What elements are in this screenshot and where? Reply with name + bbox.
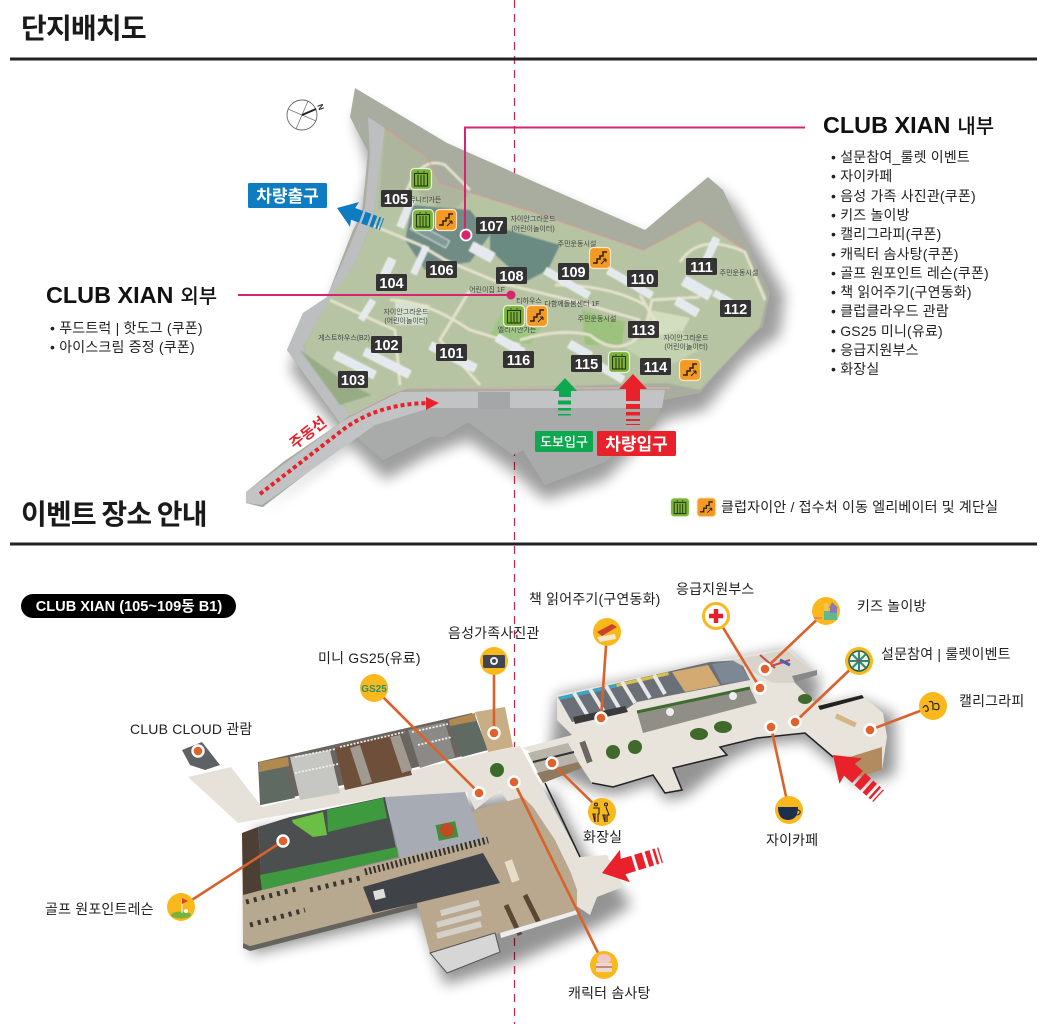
site map <box>246 88 785 512</box>
planters <box>606 745 620 759</box>
leader lines <box>181 611 933 965</box>
map place names: 엘리시안가든 <box>498 325 537 334</box>
marker dots <box>192 664 876 846</box>
map place names: 자이안그라운드 <box>383 307 429 316</box>
map place names: 다함께돌봄센터 1F <box>544 299 600 308</box>
building number tags: 114 <box>644 360 667 376</box>
labels: floor plan: 응급지원부스 <box>676 581 754 597</box>
legend: 클럽자이안 / 접수처 이동 엘리베이터 및 계단실 <box>721 499 998 515</box>
compass <box>287 100 326 130</box>
main road <box>246 390 665 505</box>
icon: cotton candy <box>590 951 618 979</box>
list: CLUB XIAN 내부: • 책 읽어주기(구연동화) <box>831 284 972 300</box>
main route dotted arrow <box>260 397 439 494</box>
list: CLUB XIAN 내부: • GS25 미니(유료) <box>831 323 943 339</box>
ground <box>246 88 770 507</box>
callout line: CLUB XIAN 외부 <box>238 290 516 300</box>
building number tags: 106 <box>429 263 454 279</box>
offices strip <box>558 660 750 722</box>
kids room <box>732 650 817 683</box>
labels: floor plan: 키즈 놀이방 <box>857 598 926 614</box>
arrow: pedestrian entrance <box>553 378 577 416</box>
building number tags: 115 <box>575 357 598 373</box>
labels: floor plan: 미니 GS25(유료) <box>318 650 421 666</box>
building number tags: 102 <box>374 338 399 354</box>
list: CLUB XIAN 외부 <box>50 320 203 355</box>
badge: 도보입구 <box>535 431 593 452</box>
building number tags: 103 <box>341 373 365 389</box>
list: CLUB XIAN 내부: • 캐릭터 솜사탕(쿠폰) <box>831 246 959 262</box>
badge: 차량출구 <box>248 183 327 208</box>
green site <box>300 128 767 415</box>
list: CLUB XIAN 내부: • 클럽클라우드 관람 <box>831 303 949 319</box>
stairs <box>430 933 500 973</box>
labels: floor plan: 화장실 <box>583 829 622 845</box>
red entrance arrow: right hall <box>822 742 890 809</box>
icon: GS25 <box>360 674 388 702</box>
labels: floor plan <box>45 581 1024 1001</box>
labels: floor plan: 골프 원포인트레슨 <box>45 901 154 917</box>
list: CLUB XIAN 내부: • 키즈 놀이방 <box>831 207 910 223</box>
cloud room <box>182 742 220 770</box>
building number tags: 116 <box>507 353 530 369</box>
map place names: 커뮤니티가든 <box>403 195 442 204</box>
heading: CLUB XIAN 내부: CLUB XIAN 내부 <box>823 112 994 138</box>
map place names: (어린이놀이터) <box>664 342 708 351</box>
list: CLUB XIAN 내부: • 캘리그라피(쿠폰) <box>831 226 941 242</box>
wood side <box>840 747 882 777</box>
floor plan shadows <box>250 650 895 985</box>
perimeter road <box>287 117 385 423</box>
list: CLUB XIAN 내부: • 화장실 <box>831 361 879 377</box>
list: CLUB XIAN 외부: • 푸드트럭 | 핫도그 (쿠폰) <box>50 320 203 336</box>
compass: N <box>315 103 326 112</box>
icon: GS25: GS25 <box>361 684 387 695</box>
labels: floor plan: 자이카페 <box>766 832 818 848</box>
list: CLUB XIAN 내부: • 응급지원부스 <box>831 342 919 358</box>
labels: floor plan: 음성가족사진관 <box>448 625 540 641</box>
labels: floor plan: CLUB CLOUD 관람 <box>130 721 252 737</box>
map place names: (어린이놀이터) <box>384 316 428 325</box>
badge: CLUB XIAN (105~109동 B1): CLUB XIAN (105~109동 B1) <box>36 599 222 615</box>
building number tags: 108 <box>499 269 524 285</box>
building number tags: 101 <box>439 346 464 362</box>
callout line: CLUB XIAN 내부 <box>460 128 805 240</box>
main route dotted arrow: 주동선 <box>287 414 330 453</box>
title: 단지배치도: 단지배치도 <box>21 13 146 44</box>
labels: floor plan: 책 읽어주기(구연동화) <box>529 591 661 607</box>
map place names <box>318 195 758 351</box>
icon: calligraphy <box>919 692 947 720</box>
fence <box>365 840 488 872</box>
elevator and stair icons on map <box>410 168 700 380</box>
labels: floor plan: 캐릭터 솜사탕 <box>568 985 651 1001</box>
edges <box>592 733 833 793</box>
icon: first aid <box>704 604 728 628</box>
icon: camera <box>480 647 508 675</box>
toilet block <box>528 743 582 783</box>
map place names: 자이안그라운드 <box>510 214 556 223</box>
courtyard <box>637 688 757 733</box>
golf area <box>258 797 398 890</box>
list: CLUB XIAN 외부: • 아이스크림 증정 (쿠폰) <box>50 339 195 355</box>
building number tags: 113 <box>632 323 655 339</box>
map place names: 어린이집 1F <box>469 285 505 294</box>
title: 이벤트 장소 안내: 이벤트 장소 안내 <box>21 499 207 530</box>
map place names: (어린이놀이터) <box>511 224 555 233</box>
labels: floor plan: 캘리그라피 <box>959 693 1024 709</box>
list: CLUB XIAN 내부: • 골프 원포인트 레슨(쿠폰) <box>831 265 989 281</box>
red entrance arrow: lower corridor <box>597 839 666 889</box>
map place names: 게스트하우스(B2) <box>318 333 370 342</box>
badge: 차량입구 <box>597 431 676 456</box>
plaza <box>385 792 482 858</box>
map place names: 주민운동시설 <box>578 314 616 323</box>
list: CLUB XIAN 내부: • 음성 가족 사진관(쿠폰) <box>831 188 976 204</box>
hall bar <box>818 695 864 710</box>
badge: CLUB XIAN (105~109동 B1) <box>21 594 236 618</box>
lower block <box>242 797 577 953</box>
icon: golf <box>167 893 195 921</box>
building number tags: 112 <box>724 302 747 318</box>
badge: 차량출구: 차량출구 <box>256 187 319 206</box>
floor plan: left wing <box>182 707 623 973</box>
heading: CLUB XIAN 외부: CLUB XIAN 외부 <box>46 282 217 308</box>
icon: book <box>593 618 621 646</box>
list: CLUB XIAN 내부: • 설문참여_룰렛 이벤트 <box>831 149 970 165</box>
corridor <box>188 746 623 915</box>
map place names: 주민운동시설 <box>720 268 758 277</box>
building number tags: 109 <box>561 265 586 281</box>
arrow: vehicle entrance <box>619 374 647 425</box>
building number tags: 107 <box>479 219 504 235</box>
arrow: exit <box>332 196 386 237</box>
labels: floor plan: 설문참여 | 룰렛이벤트 <box>881 646 1011 662</box>
building number tags <box>338 190 751 389</box>
badge: 도보입구: 도보입구 <box>540 434 588 450</box>
building number tags: 104 <box>379 276 404 292</box>
building number tags: 110 <box>631 272 654 288</box>
building number tags: 105 <box>384 192 408 208</box>
icon: restroom <box>588 798 616 826</box>
map place names: 주민운동시설 <box>558 239 596 248</box>
badge: 차량입구: 차량입구 <box>605 435 668 454</box>
icon: kids blocks <box>812 597 840 625</box>
floor plan: right wing <box>522 648 887 857</box>
icon: coffee cup <box>775 796 803 824</box>
list: CLUB XIAN 내부: • 자이카페 <box>831 168 893 184</box>
map place names: 티하우스 <box>516 296 542 305</box>
list: CLUB XIAN 내부 <box>831 149 989 377</box>
map place names: 자이안그라운드 <box>663 333 709 342</box>
upper rooms <box>258 713 488 805</box>
deck <box>363 853 500 913</box>
icon: roulette <box>845 647 873 675</box>
building number tags: 111 <box>690 260 713 276</box>
